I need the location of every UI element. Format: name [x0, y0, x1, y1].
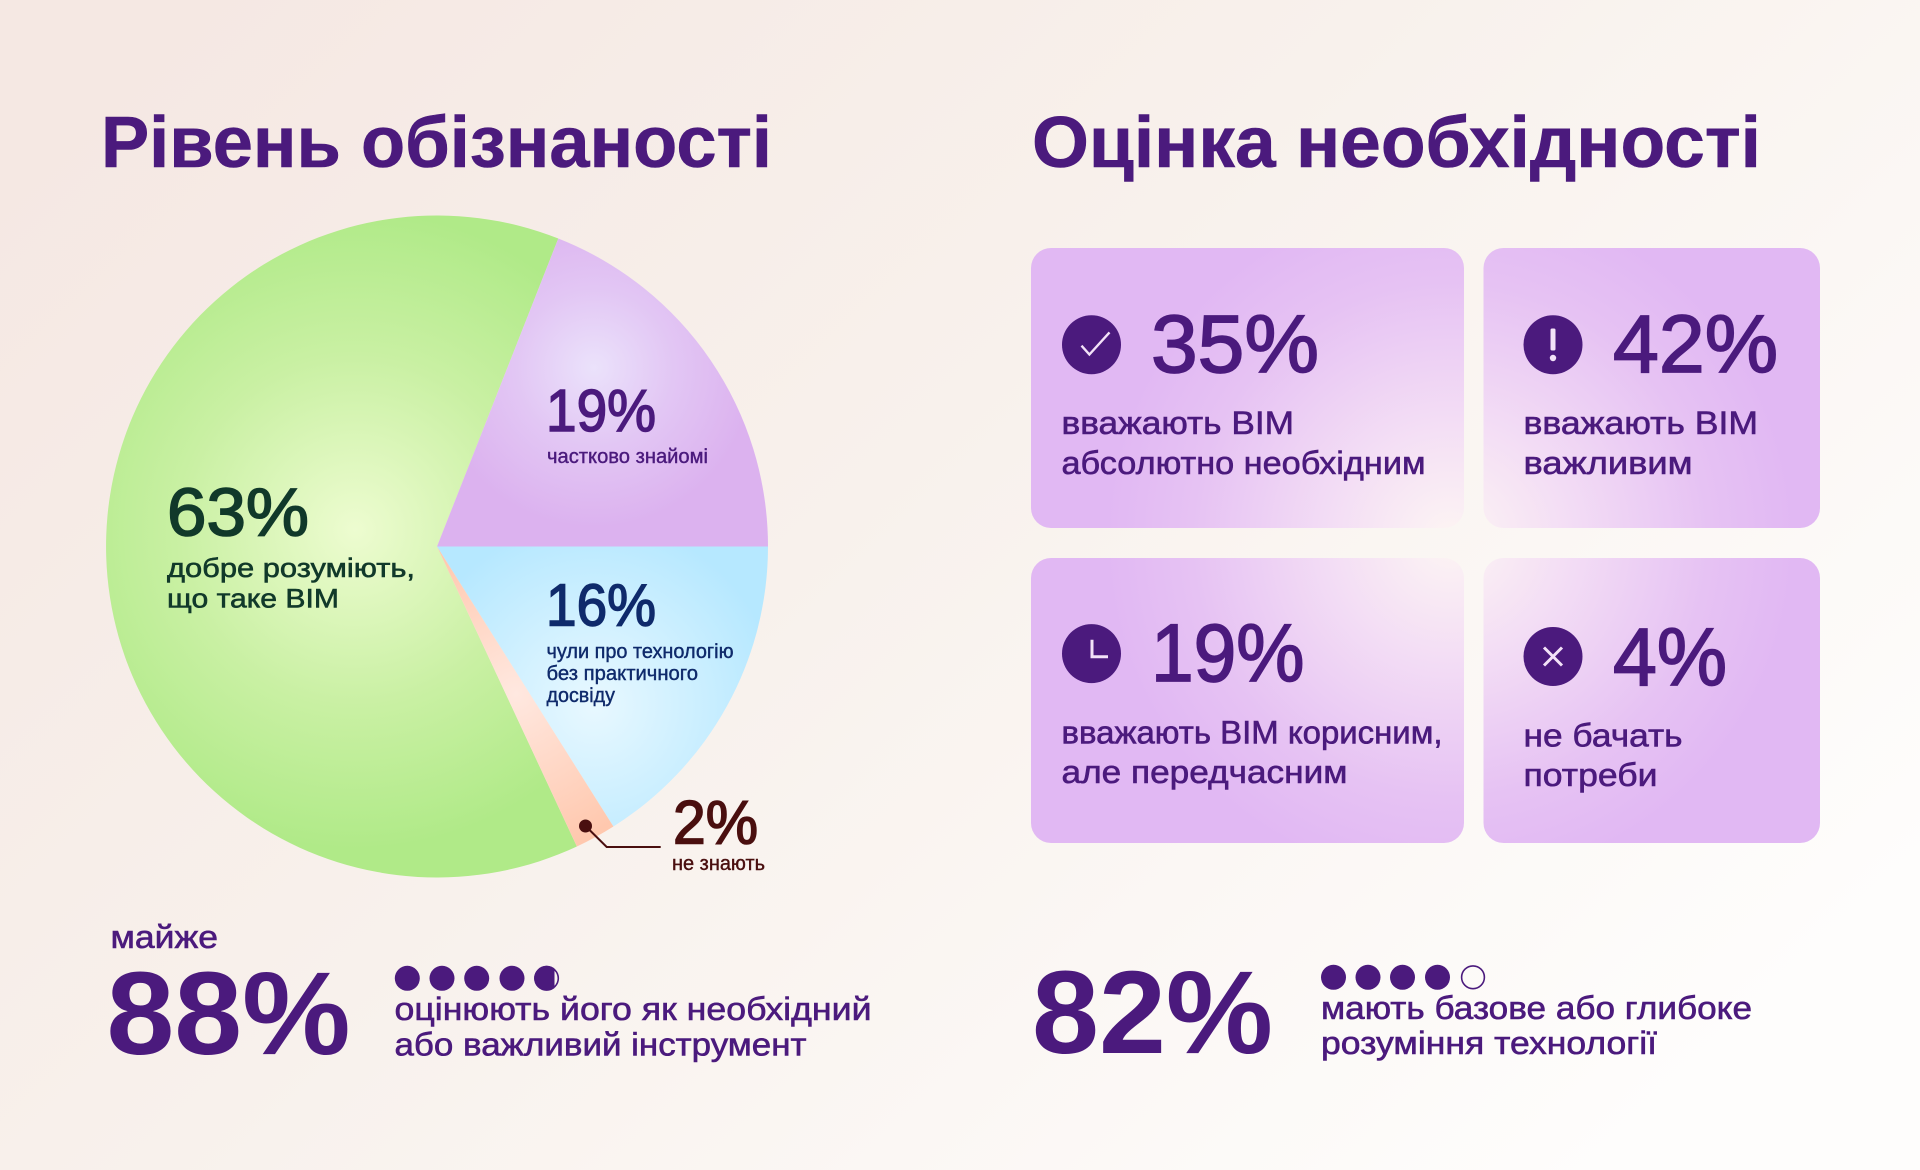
slice: 16% heard of the technology	[437, 546, 768, 826]
pie chart: awareness	[106, 215, 768, 877]
card: 19% useful but premature: 19%	[1151, 608, 1304, 699]
card: 35% absolutely necessary: 35%	[1151, 299, 1319, 390]
stat: 82%: мають базове або глибоке	[1321, 990, 1752, 1026]
card: 35% absolutely necessary: вважають BIM	[1062, 405, 1294, 441]
stat: almost 88%: 88%	[106, 948, 350, 1080]
stat: 82%	[1032, 947, 1752, 1079]
stat: almost 88%	[110, 924, 870, 1062]
card: 19% useful but premature: вважають BIM корисним,	[1062, 714, 1442, 750]
heading: necessity assessment: Оцінка необхідності	[1032, 103, 1761, 183]
card: 35% absolutely necessary: абсолютно необхідним	[1062, 445, 1426, 481]
icon: cross	[1524, 627, 1582, 686]
panel: necessity cards	[1031, 248, 1820, 843]
icon: clock	[1062, 624, 1121, 683]
slice: 63% well understand: що таке BIM	[167, 584, 339, 614]
card: 4% see no need: не бачать	[1524, 718, 1682, 754]
slice: 19% partially familiar: 19%	[546, 378, 656, 444]
stat: almost 88%: оцінюють його як необхідний	[394, 991, 872, 1027]
stat: 82%: 82%	[1032, 947, 1273, 1079]
card: 19% useful but premature	[1031, 558, 1464, 843]
slice: 16% heard of the technology: без практичного	[546, 663, 698, 685]
card: 4% see no need	[1484, 558, 1820, 843]
stat: almost 88%: майже	[110, 919, 218, 955]
card: 42% important	[1484, 248, 1820, 528]
slice: 16% heard of the technology: чули про технологію	[546, 641, 734, 663]
slice: 16% heard of the technology: досвіду	[546, 685, 615, 707]
card: 4% see no need: потреби	[1524, 757, 1658, 793]
icon: exclamation mark	[1524, 315, 1582, 374]
icon row: five dots, 88% filled	[395, 966, 559, 991]
stat: almost 88%: або важливий інструмент	[394, 1026, 807, 1062]
slice: 16% heard of the technology: 16%	[546, 572, 656, 638]
slice: 63% well understand: добре розуміють,	[167, 553, 415, 583]
slice: 63% well understand: 63%	[167, 474, 309, 550]
slice: 2% do not know	[437, 546, 765, 875]
icon row: four filled dots and one empty	[1321, 965, 1484, 990]
slice: 2% do not know: не знають	[672, 853, 765, 875]
slice: 63% well understand	[106, 215, 577, 877]
slice: 19% partially familiar: частково знайомі	[547, 446, 708, 468]
heading: awareness level: Рівень обізнаності	[101, 103, 772, 183]
slice: 2% do not know: 2%	[673, 788, 758, 856]
card: 42% important: важливим	[1524, 445, 1692, 481]
card: 42% important: вважають BIM	[1524, 405, 1758, 441]
card: 42% important: 42%	[1613, 299, 1778, 390]
card: 19% useful but premature: але передчасним	[1062, 754, 1348, 790]
stat: 82%: розуміння технології	[1321, 1025, 1657, 1061]
card: 35% absolutely necessary	[1031, 248, 1464, 528]
icon: check mark	[1062, 315, 1121, 374]
slice: 19% partially familiar	[437, 238, 768, 546]
card: 4% see no need: 4%	[1613, 612, 1727, 703]
